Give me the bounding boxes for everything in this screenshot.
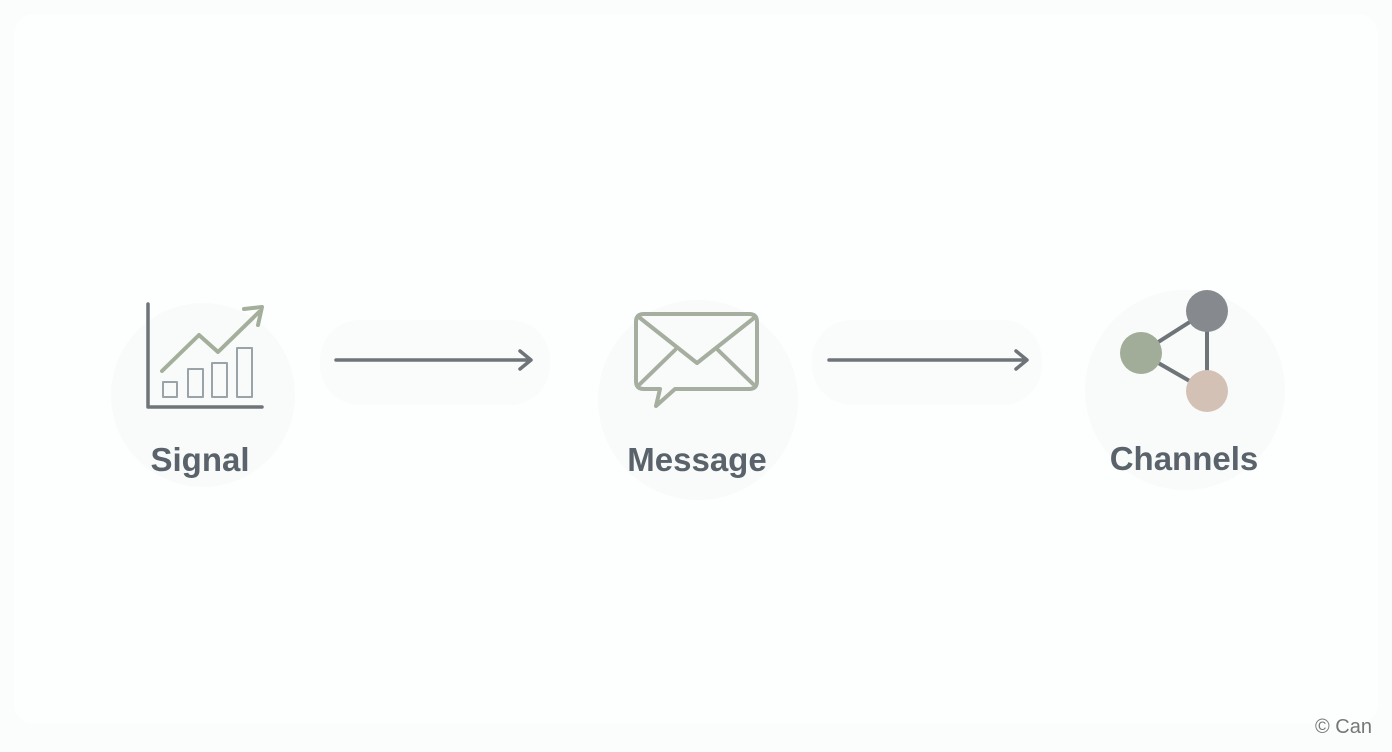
watermark: © Can xyxy=(1315,716,1372,738)
panel: signal xyxy=(111,303,295,487)
panel: message xyxy=(598,300,798,500)
label: Signal: Signal xyxy=(150,441,250,478)
icon: envelope speech xyxy=(636,314,757,406)
label: Channels: Channels xyxy=(1110,440,1258,477)
icon: network nodes xyxy=(1120,290,1228,412)
arrow 2 xyxy=(812,320,1042,405)
label: Message: Message xyxy=(627,441,767,478)
arrow 1 xyxy=(320,320,550,405)
panel: channels xyxy=(1085,290,1285,490)
icon: chart xyxy=(148,304,262,407)
